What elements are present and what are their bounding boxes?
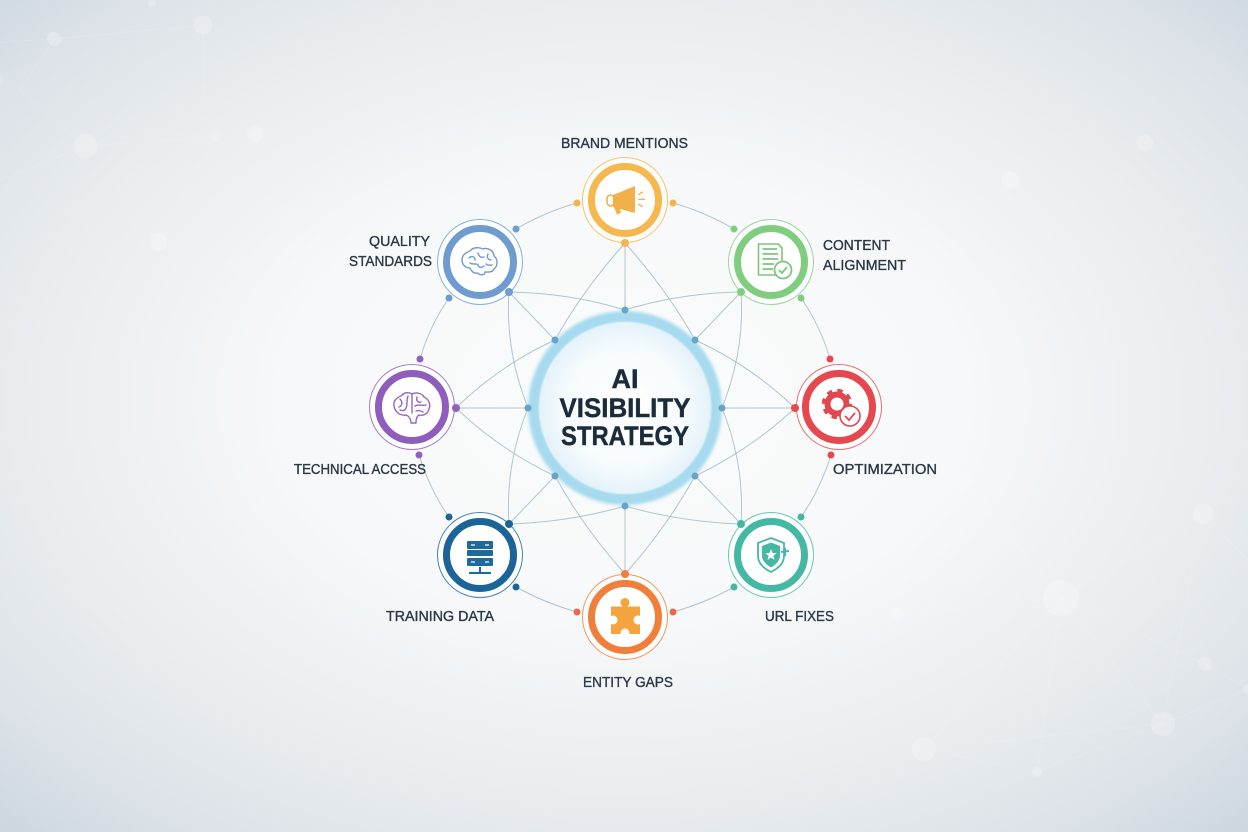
connecting lines network (419, 203, 831, 612)
title: AI (612, 364, 638, 394)
icon: puzzle piece (608, 598, 642, 638)
connector dots (791, 356, 834, 458)
title: STRATEGY (561, 421, 689, 451)
label: TECHNICAL ACCESS (294, 462, 426, 478)
icon: brain with stem (394, 393, 430, 423)
icon: shield with star (758, 538, 789, 572)
node: Brand Mentions (561, 136, 688, 247)
node: Quality Standards (349, 220, 522, 304)
icon: document with check (758, 244, 792, 278)
icon: brain outline (462, 248, 497, 275)
connector dots (446, 226, 520, 302)
icon: server rack (467, 541, 493, 574)
node: Optimization (791, 356, 937, 478)
label: ALIGNMENT (823, 258, 906, 274)
node: URL Fixes (728, 512, 834, 625)
node: Content Alignment (728, 220, 906, 304)
icon: megaphone (607, 186, 645, 214)
connector dots (730, 226, 804, 302)
title: VISIBILITY (560, 393, 690, 423)
label: URL FIXES (765, 609, 834, 625)
label: QUALITY (369, 234, 430, 250)
connector dots (574, 570, 676, 616)
icon: gear with check (824, 391, 860, 426)
node: Entity Gaps (574, 570, 676, 691)
label: BRAND MENTIONS (561, 136, 688, 152)
label: ENTITY GAPS (583, 675, 673, 691)
hub connector dots (524, 306, 726, 510)
label: TRAINING DATA (386, 609, 494, 625)
label: STANDARDS (349, 254, 432, 270)
central hub: AI Visibility Strategy (524, 306, 726, 510)
connector dots (416, 356, 460, 458)
node: Technical Access (294, 356, 460, 478)
label: OPTIMIZATION (833, 462, 937, 478)
connector dots (446, 514, 520, 590)
node: Training Data (386, 512, 522, 625)
label: CONTENT (823, 238, 890, 254)
connector dots (574, 200, 676, 247)
connector dots (730, 514, 804, 590)
